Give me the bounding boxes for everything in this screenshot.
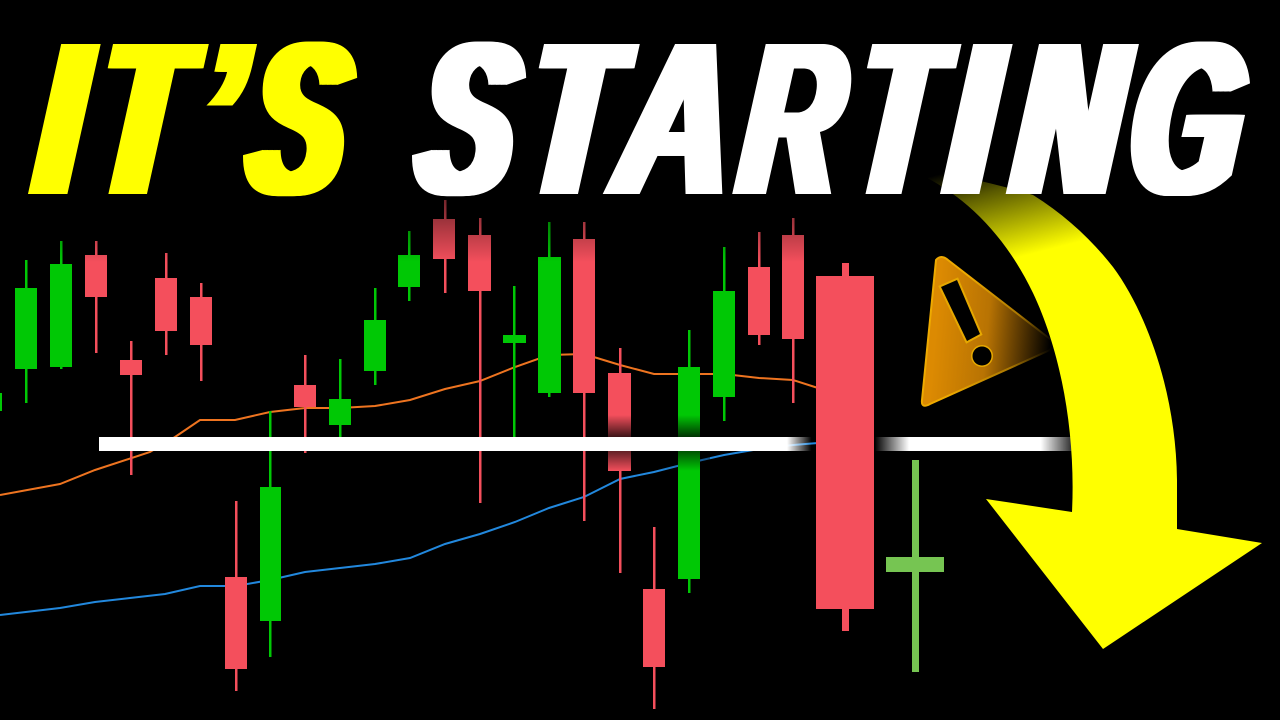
title word: STARTING: S — [410, 0, 527, 240]
title word: STARTING: R — [732, 0, 854, 240]
candlestick chart — [0, 197, 818, 709]
title word: STARTING: G — [1122, 0, 1254, 240]
title word: IT'S: T — [90, 0, 195, 240]
title word: STARTING: A — [609, 0, 742, 240]
title word: STARTING: T — [848, 0, 949, 240]
green candles — [0, 222, 735, 657]
title word: IT'S: I — [29, 0, 94, 240]
title word: STARTING — [410, 0, 1254, 240]
moving average: orange line — [0, 354, 818, 495]
support line — [99, 437, 1075, 451]
title word: STARTING: N — [1008, 0, 1132, 240]
title word: STARTING: T — [521, 0, 626, 240]
icon: warning triangle — [922, 257, 1054, 406]
title word: IT'S: ’ — [186, 0, 252, 240]
small green doji candle — [886, 460, 944, 672]
title word: STARTING: I — [941, 0, 1006, 240]
red candles — [85, 200, 804, 709]
arrow: curved yellow down arrow — [917, 173, 1262, 649]
moving average: blue line — [0, 443, 818, 615]
title word: IT'S: S — [241, 0, 358, 240]
large red candle — [816, 263, 874, 631]
title word: IT'S — [28, 0, 358, 240]
